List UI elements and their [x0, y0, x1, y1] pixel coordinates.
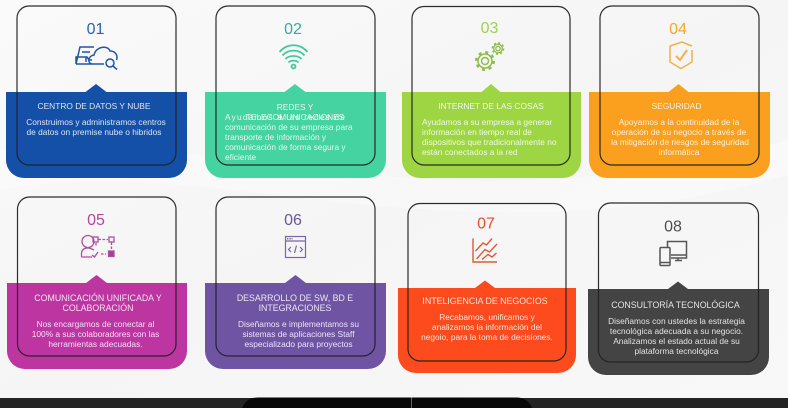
icon: shield check — [670, 42, 692, 68]
icon: cloud data center — [76, 47, 117, 70]
panel: card 04 seguridad: operación de su negocio a través de — [612, 127, 747, 137]
panel: card 03 internet de las cosas — [402, 6, 581, 178]
title: INTERNET DE LAS COSAS — [438, 101, 544, 111]
panel: card 02 redes: eficiente — [225, 152, 256, 162]
panel: card 01 centro de datos — [6, 6, 187, 178]
number 03: 03 — [481, 20, 498, 37]
title: DESARROLLO DE SW, BD E — [237, 293, 353, 303]
panel: card 08 consultoria: Analizamos el estado actual de su — [613, 336, 740, 346]
number 05: 05 — [87, 212, 105, 229]
panel: card 06 desarrollo: especializado para proyectos — [244, 339, 353, 349]
panel: card 05 comunicacion unificada: COLABORACIÓN — [63, 303, 133, 313]
panel: card 03 internet de las cosas: están conectados a la red — [422, 147, 518, 157]
description: Nos encargamos de conectar al — [37, 319, 155, 329]
panel: card 07 inteligencia de negocios: analizamos la información del — [432, 322, 542, 332]
panel: card 08 consultoria — [588, 203, 769, 375]
icon: code window — [286, 236, 306, 258]
panel: card 06 desarrollo: INTEGRACIONES — [259, 303, 332, 313]
title: INTELIGENCIA DE NEGOCIOS — [422, 296, 548, 306]
panel: card 03 internet de las cosas: información en tiempo real de — [422, 127, 532, 137]
icon: wifi — [280, 45, 308, 68]
panel: card 05 comunicacion unificada: herramientas adecuadas. — [48, 339, 143, 349]
panel: card 02 redes: comunicación de forma segura y — [225, 142, 346, 152]
panel: card 05 comunicacion unificada — [7, 197, 187, 369]
panel: card 01 centro de datos: de datos on premise nube o hibridos — [27, 127, 161, 137]
panel: card 05 comunicacion unificada: 100% a sus colaboradores con las — [32, 329, 159, 339]
title: REDES Y — [277, 102, 314, 112]
description: Diseñamos con ustedes la estrategia — [608, 316, 745, 326]
panel: card 07 inteligencia de negocios — [398, 204, 576, 373]
panel: card 04 seguridad: la mitigación de riesgos de seguridad — [611, 137, 749, 147]
title: SEGURIDAD — [652, 101, 701, 111]
description: Diseñamos e implementamos su — [238, 319, 359, 329]
icon: line chart — [473, 238, 497, 262]
icon: devices — [660, 242, 686, 266]
footer bar — [0, 398, 788, 408]
panel: card 02 redes: comunicación de su empresa para — [225, 122, 353, 132]
panel: card 04 seguridad: informática — [659, 147, 700, 157]
panel: card 08 consultoria: tecnológica adecuada a su negocio. — [610, 326, 743, 336]
number 02: 02 — [284, 21, 302, 38]
number 06: 06 — [284, 212, 302, 229]
number 08: 08 — [664, 218, 682, 236]
panel: card 06 desarrollo — [205, 197, 386, 369]
description: Recabamos, unificamos y — [439, 312, 536, 322]
title: CENTRO DE DATOS Y NUBE — [38, 101, 151, 111]
description: Construimos y administramos centros — [26, 117, 166, 127]
description: Ayudamos a las redes de — [225, 112, 345, 122]
title: COMUNICACIÓN UNIFICADA Y — [34, 293, 162, 303]
description: Ayudamos a su empresa a generar — [422, 117, 552, 127]
panel: card 02 redes — [205, 6, 386, 178]
number 07: 07 — [477, 216, 495, 232]
icon: gears — [476, 43, 503, 70]
icon: user network — [82, 236, 114, 257]
panel: card 06 desarrollo: sistemas de aplicaciones Staff — [242, 329, 355, 339]
panel: card 02 redes: TELECOMUNICACIONES — [246, 112, 345, 122]
panel: card 07 inteligencia de negocios: negoio, para la toma de decisiones. — [421, 332, 553, 342]
number 01: 01 — [87, 21, 104, 38]
description: Apoyamos a la continuidad de la — [619, 117, 740, 127]
title: CONSULTORÍA TECNOLÓGICA — [611, 300, 740, 310]
panel: card 08 consultoria: plataforma tecnológica — [635, 346, 719, 356]
panel: card 02 redes: transporte de información y — [225, 132, 327, 142]
panel: card 04 seguridad — [589, 6, 770, 178]
number 04: 04 — [669, 21, 687, 38]
panel: card 03 internet de las cosas: dispositivos que tradicionalmente no — [422, 137, 557, 147]
